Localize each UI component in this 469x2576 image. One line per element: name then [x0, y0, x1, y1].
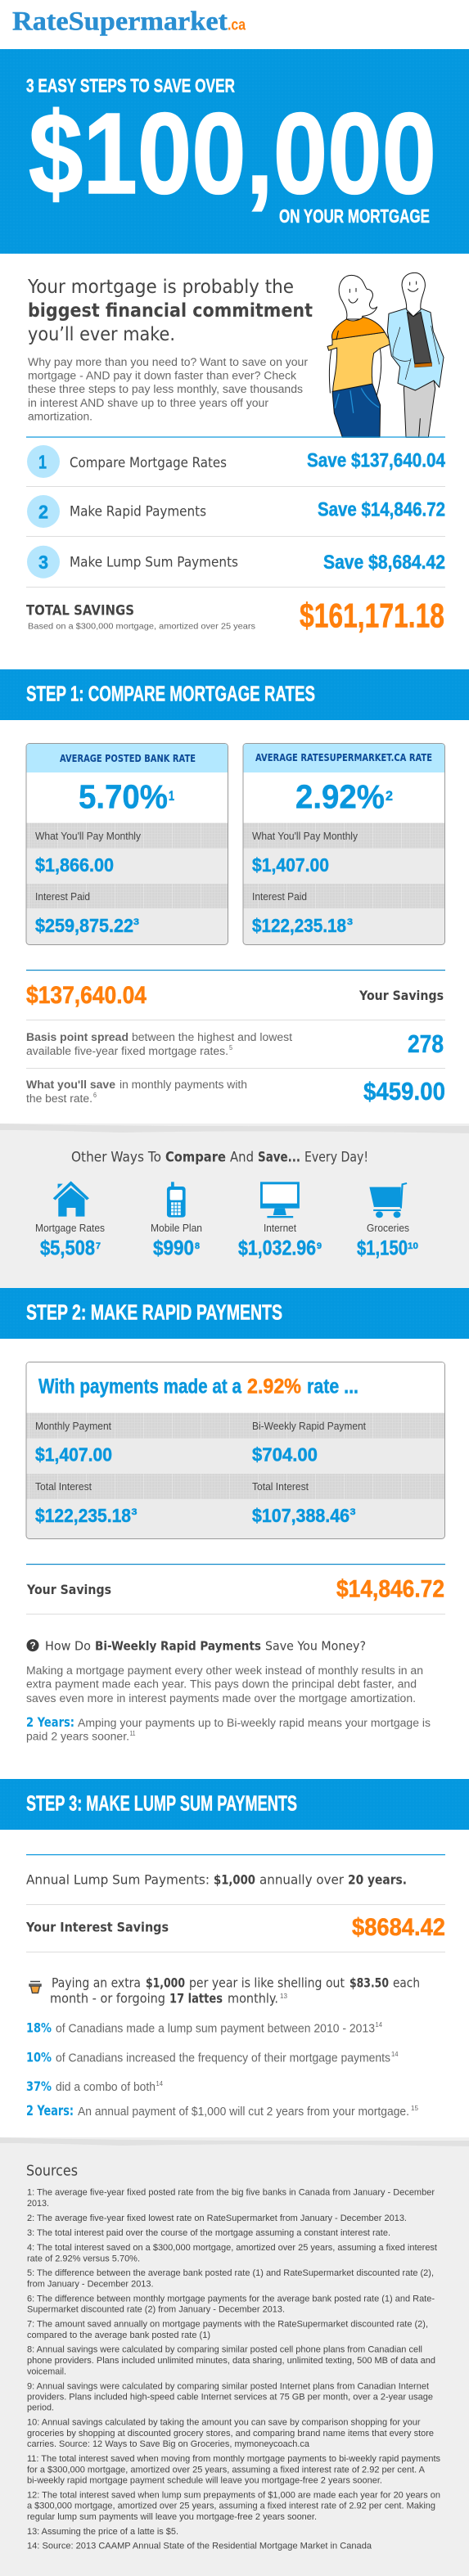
source notes: a $300,000 mortgage, amortized over 25 years, assuming a fixed interest rate of 2.92 per cent. Making — [27, 2502, 435, 2511]
basis value: 278 — [408, 1029, 444, 1058]
card title: 2.92% — [247, 1376, 301, 1398]
panel heading: Other Ways To — [71, 1149, 161, 1164]
bi-weekly explainer — [26, 1639, 431, 1743]
intro paragraph: these three steps to pay less monthly, save thousands — [28, 383, 303, 395]
stat: 2 years: An annual payment of $1,000 will cut 2 years from your mortgage. — [78, 2105, 409, 2119]
woman pants — [332, 384, 381, 437]
basis point stat — [26, 1029, 444, 1058]
monthly column: $122,235.18 — [35, 1505, 131, 1526]
icon: coffee cup — [29, 1982, 41, 1993]
annual lump sum line: 20 years. — [348, 1872, 407, 1888]
panel: other ways to compare and save: And — [230, 1149, 254, 1164]
step 1 header — [0, 669, 469, 720]
source notes: voicemail. — [27, 2367, 66, 2376]
man jacket — [387, 308, 444, 390]
step row 2 — [27, 495, 445, 528]
step row 1: 1 — [38, 452, 47, 473]
card title: rate ... — [307, 1376, 359, 1398]
2 years note — [26, 1714, 431, 1743]
rate value: 5.70% — [79, 777, 168, 815]
source notes: bi-weekly rapid mortgage payment schedule will leave you mortgage-free 2 years sooner. — [27, 2475, 382, 2485]
explainer heading — [45, 1639, 366, 1654]
monthly payment: What You'll Pay Monthly — [35, 831, 142, 842]
latte text: per year is like shelling out — [189, 1975, 345, 1990]
stat: 37%: 14 — [156, 2080, 164, 2087]
man belt — [415, 363, 432, 367]
source notes: providers. Plans included high-speed cable Internet services at 75 GB per month, over a 2-year usage — [27, 2392, 433, 2402]
latte text — [50, 1975, 420, 2006]
source notes: carries. Source: 12 Ways to Save Big on Groceries, mymoneycoach.ca — [27, 2439, 310, 2449]
monthly column: Total Interest — [35, 1481, 92, 1493]
source notes: rate of 2.92% versus 5.70%. — [27, 2254, 140, 2263]
intro heading — [27, 277, 313, 345]
comparison: mobile plan: $990 — [153, 1236, 194, 1259]
stat: 18%: 18% — [26, 2020, 52, 2035]
step row 3: 3 — [38, 552, 48, 573]
latte text: 13 — [280, 1992, 287, 2000]
comparison: groceries — [357, 1223, 418, 1259]
panel: other ways to compare and save — [0, 1124, 469, 1288]
source notes: compared to the average bank posted rate (1) — [27, 2331, 210, 2340]
monthly column: Monthly Payment — [35, 1421, 111, 1432]
source notes: 2: The average five-year fixed lowest rate on RateSupermarket from January - December 2013. — [27, 2213, 407, 2223]
woman shirt upper — [331, 317, 385, 340]
hero kicker: 3 EASY STEPS TO SAVE OVER — [26, 75, 235, 97]
rate card: average RateSupermarket.ca rate: $1,407.00 — [252, 854, 329, 876]
basis point stat: between the highest and lowest — [132, 1031, 292, 1043]
comparison: mortgage rates: Mortgage Rates — [35, 1223, 105, 1234]
monthly saving stat: 6 — [93, 1092, 97, 1099]
man shirt — [407, 312, 431, 363]
source notes: for a $300,000 mortgage, amortized over 25 years, assuming a fixed interest rate of 2.92 per cent. A — [27, 2465, 425, 2475]
2 years note: paid 2 years sooner. — [26, 1731, 129, 1743]
intro paragraph — [28, 356, 309, 422]
source notes: 12: The total interest saved when lump sum prepayments of $1,000 are made each year for 20 years on — [27, 2490, 440, 2500]
step 1 savings: Your Savings — [359, 988, 444, 1003]
card title: AVERAGE POSTED BANK RATE — [60, 752, 196, 764]
intro heading: you’ll ever make. — [28, 324, 175, 345]
row label: Compare Mortgage Rates — [70, 455, 227, 471]
panel: other ways to compare and save: Save... — [258, 1149, 300, 1164]
latte text: monthly. — [228, 1991, 278, 2006]
monthly value: $459.00 — [363, 1077, 445, 1106]
number badge 1 — [27, 445, 60, 478]
card title: With payments made at a — [38, 1376, 242, 1398]
icon: question mark: ? — [29, 1640, 36, 1651]
basis point stat: 5 — [229, 1044, 232, 1052]
explainer body: saves even more in interest payments made over the mortgage amortization. — [26, 1692, 416, 1705]
2 years note: 2 Years: — [26, 1714, 74, 1730]
intro paragraph: in interest AND shave up to three years off your — [28, 397, 269, 409]
stat: 10%: 10% — [26, 2049, 52, 2065]
stat: 37%: 37% — [26, 2078, 52, 2094]
stat: 10%: of Canadians increased the frequency of their mortgage payments — [56, 2051, 390, 2065]
source notes: 13: Assuming the price of a latte is $5. — [27, 2527, 178, 2537]
step 2 savings: $14,846.72 — [336, 1576, 444, 1603]
comparison: groceries: 10 — [408, 1241, 418, 1251]
interest paid: Interest Paid — [35, 891, 90, 903]
icon: shopping cart — [369, 1183, 407, 1218]
stat: 18%: of Canadians made a lump sum payment between 2010 - 2013 — [56, 2022, 375, 2035]
stat: 37%: did a combo of both — [56, 2081, 156, 2094]
panel: other ways to compare and save: Every Day! — [304, 1149, 368, 1164]
monthly saving stat: What you'll save — [26, 1079, 115, 1091]
monthly payment: What You'll Pay Monthly — [252, 831, 359, 842]
logo: RateSupermarket.ca: .ca — [228, 16, 246, 34]
comparison: groceries: Groceries — [367, 1223, 409, 1234]
intro paragraph: Why pay more than you need to? Want to save on your — [28, 356, 309, 368]
source notes: 7: The amount saved annually on mortgage payments with the RateSupermarket discounted rate (2), — [27, 2320, 428, 2330]
intro heading: Your mortgage is probably the — [27, 277, 294, 298]
intro heading: biggest financial commitment — [28, 300, 313, 322]
source notes — [27, 2188, 440, 2551]
rate card: average RateSupermarket.ca rate: $122,235.18 — [252, 915, 346, 936]
intro paragraph: amortization. — [28, 411, 92, 422]
annual lump sum line: Annual Lump Sum Payments: — [26, 1872, 210, 1888]
bi-weekly column: Bi-Weekly Rapid Payment — [252, 1421, 367, 1432]
step row 3 — [27, 546, 445, 579]
total savings: Based on a $300,000 mortgage, amortized over 25 years — [28, 622, 255, 632]
total savings — [26, 597, 444, 635]
step row 2: 2 — [38, 501, 48, 522]
number badge 3 — [27, 546, 60, 579]
row label: Make Rapid Payments — [70, 504, 206, 520]
bi-weekly column: Total Interest — [252, 1481, 309, 1493]
stat: 18%: 14 — [375, 2021, 383, 2029]
latte text: $1,000 — [146, 1975, 185, 1990]
icon: house — [53, 1181, 89, 1217]
panel: other ways to compare and save: Compare — [165, 1149, 226, 1164]
interest savings: Your Interest Savings — [25, 1920, 169, 1935]
annual lump sum line — [26, 1872, 407, 1888]
source notes: 11: The total interest saved when moving from monthly mortgage payments to bi-weekly rapid payments — [27, 2454, 440, 2464]
step 1 savings: $137,640.04 — [26, 982, 147, 1009]
stat: 2 years: 2 Years: — [26, 2103, 74, 2119]
source notes: 3: The total interest paid over the course of the mortgage assuming a constant interest rate. — [27, 2228, 390, 2238]
comparison: mobile plan — [151, 1223, 202, 1259]
step 2 header — [0, 1288, 469, 1339]
annual lump sum line: $1,000 — [214, 1872, 255, 1888]
monthly saving stat — [26, 1077, 445, 1106]
total savings: TOTAL SAVINGS — [26, 603, 134, 619]
explainer heading: Bi-Weekly Rapid Payments — [95, 1639, 261, 1654]
latte note — [29, 1975, 420, 2006]
stat: 2 years: 15 — [411, 2105, 419, 2112]
interest savings — [25, 1914, 445, 1941]
step row 1 — [27, 445, 446, 478]
source notes: 8: Annual savings were calculated by comparing similar posted cell phone plans from Canadian cell — [27, 2345, 422, 2355]
rate card: average posted bank rate — [26, 743, 228, 944]
2 years note: Amping your payments up to Bi-weekly rapid means your mortgage is — [78, 1717, 431, 1729]
explainer body: extra payment made each year. This pays down the principal debt faster, and — [26, 1678, 417, 1691]
woman arms — [329, 347, 381, 401]
source notes: 14: Source: 2013 CAAMP Annual State of the Residential Mortgage Market in Canada — [27, 2542, 372, 2551]
source notes: 4: The total interest saved on a $300,000 mortgage, amortized over 25 years, assuming a fixed interest — [27, 2243, 438, 2253]
rate value: 2.92% — [295, 777, 385, 815]
rapid payments card — [26, 1362, 445, 1538]
source notes: 2013. — [27, 2199, 49, 2209]
comparison: internet: Internet — [264, 1223, 296, 1234]
step 1 savings — [26, 982, 444, 1009]
source notes: 5: The difference between the average bank posted rate (1) and RateSupermarket discounted rate (2), — [27, 2268, 434, 2278]
explainer heading: Save You Money? — [265, 1639, 366, 1654]
stat: 37% — [26, 2078, 164, 2094]
rate card: average RateSupermarket.ca rate: 2 — [386, 788, 393, 804]
step 1 header: STEP 1: COMPARE MORTGAGE RATES — [26, 683, 315, 706]
comparison: mobile plan: Mobile Plan — [151, 1223, 202, 1234]
source notes: from January - December 2013. — [27, 2279, 154, 2289]
comparison: mortgage rates: $5,508 — [40, 1236, 95, 1259]
explainer heading: How Do — [45, 1639, 91, 1654]
comparison: mobile plan: 8 — [195, 1241, 200, 1251]
hero banner — [0, 49, 469, 254]
monthly saving stat: the best rate. — [26, 1092, 92, 1105]
step 3 header — [0, 1779, 469, 1830]
rate card: average posted bank rate: $259,875.22 — [35, 915, 133, 936]
source notes: 6: The difference between monthly mortgage payments for the average bank posted rate (1) and Rate- — [27, 2295, 435, 2304]
source notes: regular lump sum payments will leave you mortgage-free 2 years sooner. — [27, 2512, 317, 2522]
latte text: month - or forgoing — [50, 1991, 165, 2006]
icon: question mark — [26, 1639, 39, 1651]
source notes: Supermarket discounted rate (2) from January - December 2013. — [27, 2305, 285, 2315]
interest savings: $8684.42 — [352, 1914, 445, 1941]
source notes: 10: Annual savings calculated by taking the amount you can save by comparison shopping for your — [27, 2418, 421, 2428]
man pants — [404, 367, 435, 437]
bi-weekly column: $107,388.46 — [252, 1505, 349, 1526]
row amount: Save $8,684.42 — [323, 552, 445, 574]
illustration: couple — [327, 272, 444, 437]
woman shirt lower — [327, 332, 391, 391]
logo: RateSupermarket.ca: RateSupermarket — [12, 7, 228, 36]
source notes: 9: Annual savings were calculated by comparing similar posted Internet plans from Canadian Internet — [27, 2381, 430, 2391]
row label: Make Lump Sum Payments — [70, 555, 238, 570]
monthly column — [35, 1421, 138, 1526]
stat: 10%: 14 — [391, 2051, 399, 2058]
icon: mobile phone — [167, 1182, 186, 1218]
comparison: groceries: $1,150 — [357, 1236, 408, 1259]
bi-weekly column — [252, 1421, 367, 1526]
panel: sources — [0, 2137, 469, 2576]
step 2 savings: Your Savings — [26, 1582, 111, 1597]
woman head — [339, 275, 377, 319]
explainer body: Making a mortgage payment every other week instead of monthly results in an — [26, 1664, 423, 1677]
rate card: average posted bank rate: 3 — [133, 917, 139, 927]
number badge 2 — [27, 495, 60, 528]
rate card: average RateSupermarket.ca rate: 3 — [347, 917, 353, 927]
rate card: average RateSupermarket.ca rate — [243, 743, 445, 944]
interest paid: Interest Paid — [252, 891, 307, 903]
comparison: internet: $1,032.96 — [238, 1236, 316, 1259]
comparison: internet: 9 — [317, 1241, 322, 1251]
stat: 2 years — [26, 2103, 419, 2119]
bi-weekly column: $704.00 — [252, 1444, 318, 1466]
intro paragraph: mortgage - AND pay it down faster than ever? Check — [28, 370, 296, 381]
source notes: phone providers. Plans included unlimited minutes, data sharing, unlimited texting, 500 MB of data and — [27, 2356, 435, 2366]
latte text: $83.50 — [349, 1975, 389, 1990]
source notes: 1: The average five-year fixed posted rate from the big five banks in Canada from January - December — [27, 2188, 435, 2198]
2 years note: 11 — [129, 1730, 136, 1737]
annual lump sum line: annually over — [259, 1872, 344, 1888]
step 2 savings — [26, 1576, 444, 1603]
explainer body — [26, 1664, 423, 1705]
bi-weekly column: 3 — [350, 1507, 355, 1517]
row amount: Save $137,640.04 — [307, 450, 446, 472]
divider — [26, 437, 445, 438]
source notes: period. — [27, 2403, 54, 2413]
row amount: Save $14,846.72 — [318, 499, 445, 521]
man head — [402, 272, 425, 317]
basis point stat: Basis point spread — [26, 1031, 129, 1043]
rate card: average posted bank rate: $1,866.00 — [35, 854, 114, 876]
comparison: internet — [238, 1223, 322, 1259]
sources heading: Sources — [26, 2163, 78, 2179]
comparison: mortgage rates — [35, 1223, 105, 1259]
latte text: each — [393, 1975, 420, 1990]
monthly saving stat: in monthly payments with — [120, 1079, 247, 1091]
rate card: average posted bank rate: 1 — [169, 788, 174, 804]
monthly column: 3 — [131, 1507, 138, 1517]
step 3 header: STEP 3: MAKE LUMP SUM PAYMENTS — [26, 1793, 297, 1816]
basis point stat: available five-year fixed mortgage rates. — [26, 1045, 228, 1057]
comparison: mortgage rates: 7 — [96, 1241, 101, 1251]
icon: computer monitor — [260, 1182, 300, 1218]
monthly column: $1,407.00 — [35, 1444, 112, 1466]
latte text: Paying an extra — [52, 1975, 141, 1990]
latte text: 17 lattes — [169, 1991, 223, 2006]
source notes: groceries by shopping at discounted grocery stores, and comparing brand name items that every store — [27, 2429, 434, 2439]
step 2 header: STEP 2: MAKE RAPID PAYMENTS — [26, 1302, 282, 1325]
